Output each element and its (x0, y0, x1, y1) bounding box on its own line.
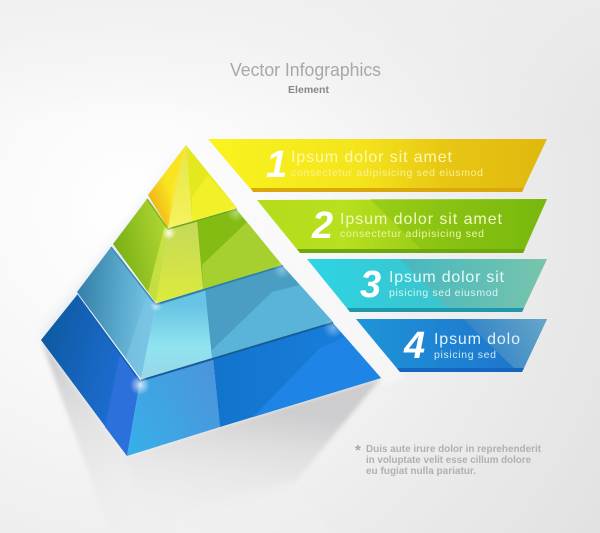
banner 2 subtext: consectetur adipisicing sed (340, 228, 484, 240)
footnote: * (355, 442, 361, 459)
footnote: eu fugiat nulla pariatur. (366, 466, 476, 477)
layer 2: green (113, 199, 283, 304)
layer 4: dark blue base (41, 295, 381, 456)
pyramid (41, 145, 381, 456)
subtitle: Element (288, 84, 329, 96)
footnote (355, 442, 542, 477)
footnote: in voluptate velit esse cillum dolore (366, 455, 531, 466)
layer 1: yellow (148, 145, 237, 229)
layer 3: light blue (77, 247, 333, 380)
banner 1 (208, 139, 547, 192)
footnote: Duis aute irure dolor in reprehenderit (366, 444, 542, 455)
pyramid shadow (41, 340, 381, 533)
number 3: 3 (360, 264, 381, 306)
highlights (130, 204, 343, 395)
number 1: 1 (266, 144, 287, 186)
number 4: 4 (403, 325, 425, 367)
banner 2 heading: Ipsum dolor sit amet (340, 211, 503, 228)
banner 3 (307, 259, 547, 312)
number 2: 2 (311, 205, 333, 247)
title: Vector Infographics (230, 60, 381, 80)
banner 4 (356, 319, 547, 372)
banner 4 subtext: pisicing sed (434, 349, 496, 361)
banner 1 heading: Ipsum dolor sit amet (291, 149, 453, 166)
banner 4 heading: Ipsum dolo (434, 331, 520, 348)
banner 2 (257, 199, 547, 253)
banner 3 heading: Ipsum dolor sit (389, 269, 505, 286)
banner 1 subtext: consectetur adipisicing sed eiusmod (291, 167, 483, 179)
glow behind pyramid (40, 150, 186, 340)
banner 3 subtext: pisicing sed eiusmod (389, 287, 498, 299)
